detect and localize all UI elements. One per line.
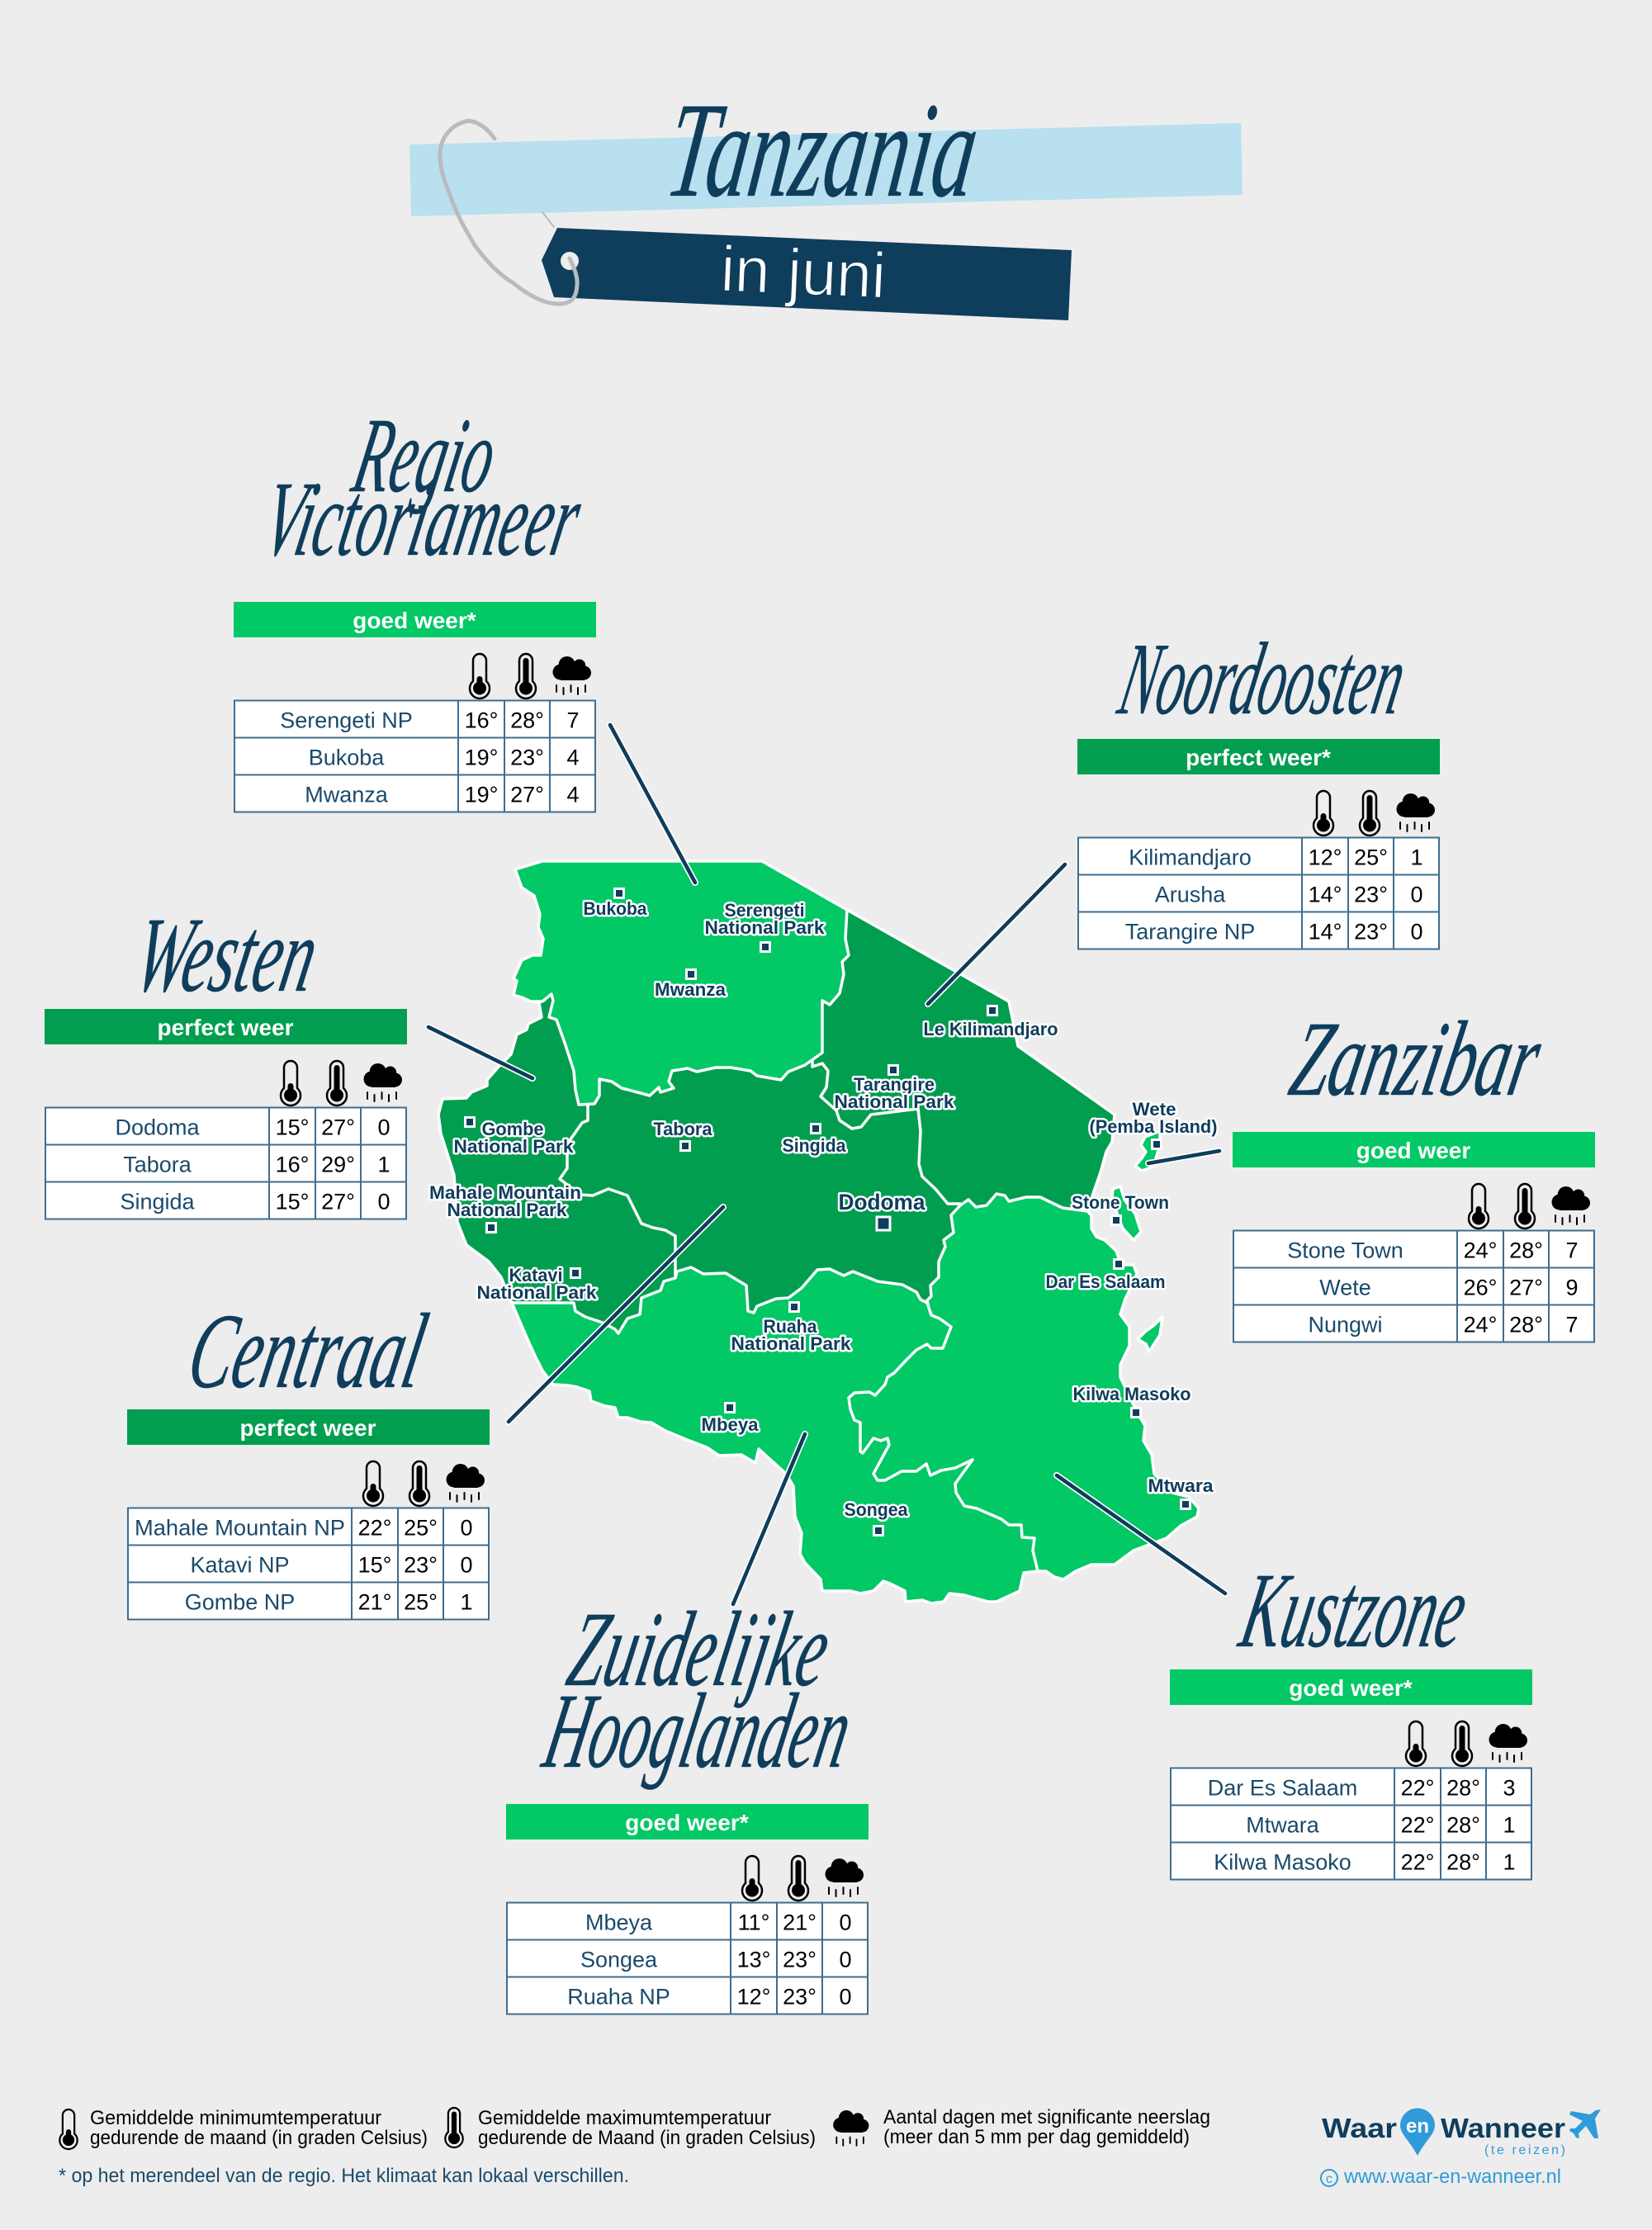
legend: maximum temperature [445, 2107, 816, 2149]
map label: Katavi National Park: National Park [477, 1282, 597, 1303]
map label: Le Kilimandjaro [923, 1006, 1058, 1039]
island: Zanzibar [1112, 1186, 1141, 1240]
legend text [883, 2106, 1210, 2148]
map label: Tarangire National Park: Tarangire [854, 1074, 935, 1095]
climate table: 29° [321, 1153, 355, 1177]
heading: Westen: Westen [125, 896, 328, 1015]
map label: Wete (Pemba Island) [1090, 1099, 1217, 1149]
climate table: 23° [404, 1552, 438, 1577]
climate table: 7 [1565, 1313, 1579, 1338]
climate table: 14° [1309, 882, 1342, 907]
climate table: 0 [839, 1985, 852, 2010]
map label: Gombe National Park: National Park [454, 1136, 574, 1157]
climate table: 13° [737, 1947, 770, 1972]
map label: Serengeti National Park [705, 900, 825, 951]
icon: location pin [1400, 2109, 1435, 2156]
climate table: 1 [377, 1153, 391, 1177]
icons: min, max, rain [470, 654, 591, 698]
climate table [45, 1108, 406, 1219]
climate table: Tabora [123, 1153, 192, 1177]
legend text: gedurende de Maand (in graden Celsius) [478, 2127, 816, 2149]
map label: Bukoba: Bukoba [583, 898, 647, 919]
climate table: 15° [276, 1189, 309, 1214]
climate table: 9 [1565, 1275, 1579, 1300]
connector: Noordoosten [928, 864, 1065, 1004]
rating bar: goed weer [234, 602, 596, 637]
logo wordmark right: Wanneer [1441, 2113, 1565, 2143]
climate table: 28° [1446, 1849, 1480, 1874]
heading: Regio Victoriameer [254, 396, 591, 579]
rating bar: perfect weer: perfect weer [158, 1015, 294, 1040]
map label: Mahale Mountain National Park: National Park [447, 1200, 567, 1220]
climate table: 22° [1401, 1849, 1434, 1874]
climate table: 27° [321, 1115, 355, 1139]
climate table: 15° [358, 1552, 391, 1577]
title: Tanzania: Tanzania [659, 74, 987, 225]
climate table: 1 [460, 1590, 473, 1615]
climate table: Bukoba [309, 745, 385, 769]
icons: min, max, rain [1406, 1721, 1527, 1766]
climate table: 23° [510, 745, 544, 769]
climate table: Serengeti NP [280, 708, 413, 733]
heading: Regio Victoriameer: Victoriameer [254, 460, 591, 579]
climate table: 16° [276, 1153, 309, 1177]
map label: Serengeti National Park: Serengeti [725, 900, 804, 921]
icons: min, max, rain [1469, 1184, 1590, 1229]
climate table: 0 [377, 1189, 391, 1214]
rating bar: perfect weer [127, 1409, 490, 1445]
climate table: 0 [839, 1910, 852, 1935]
climate table: 28° [1509, 1238, 1543, 1263]
border: Westen and Centraal [560, 1105, 675, 1278]
map label: Gombe National Park: Gombe [482, 1119, 543, 1139]
island: Pemba [1135, 1131, 1160, 1171]
climate table: 23° [783, 1947, 817, 1972]
climate table: 7 [1565, 1238, 1579, 1263]
subtitle: in juni: in juni [719, 232, 888, 312]
climate table: Mwanza [305, 783, 389, 807]
climate table: 23° [1354, 882, 1388, 907]
heading: Zuidelijke Hooglanden [534, 1590, 861, 1791]
map label: Stone Town [1072, 1192, 1169, 1225]
climate table: 24° [1464, 1238, 1497, 1263]
climate table: 24° [1464, 1313, 1497, 1338]
climate table [1078, 837, 1439, 949]
climate table: Tarangire NP [1125, 920, 1255, 945]
map label: Dar Es Salaam: Dar Es Salaam [1045, 1271, 1166, 1292]
map label: Kilwa Masoko: Kilwa Masoko [1073, 1384, 1190, 1404]
climate table: 1 [1410, 845, 1423, 870]
climate table: Kilwa Masoko [1214, 1849, 1351, 1874]
copyright icon [1321, 2170, 1337, 2186]
climate table: Ruaha NP [567, 1985, 670, 2010]
climate table [507, 1902, 868, 2015]
rating bar: goed weer [1170, 1669, 1532, 1705]
footnote: * op het merendeel van de regio. Het klimaat kan lokaal verschillen. [59, 2165, 629, 2187]
climate table [234, 700, 595, 812]
climate table: 28° [1509, 1313, 1543, 1338]
connector: Kustzone [1057, 1475, 1225, 1593]
legend text: (meer dan 5 mm per dag gemiddeld) [883, 2126, 1190, 2148]
climate table: 21° [358, 1590, 391, 1615]
map label: Mwanza [655, 969, 727, 1000]
climate table [1233, 1230, 1594, 1342]
map label: Bukoba [583, 888, 647, 919]
map label: Katavi National Park [477, 1265, 597, 1303]
connector: Regio Victoriameer [610, 725, 695, 883]
tagline: (te reizen) [1484, 2143, 1565, 2157]
climate table: 28° [1446, 1813, 1480, 1838]
border: Centraal and Noordoosten [812, 1059, 960, 1204]
rating bar: perfect weer: perfect weer [240, 1415, 376, 1441]
legend text [90, 2107, 428, 2149]
climate table: Kilimandjaro [1129, 845, 1252, 870]
climate table: Dodoma [115, 1115, 201, 1139]
climate table: Wete [1319, 1275, 1371, 1300]
climate table: Arusha [1155, 882, 1226, 907]
map label: Dar Es Salaam [1045, 1260, 1166, 1292]
climate table: Stone Town [1287, 1238, 1403, 1263]
climate table: 16° [465, 708, 498, 733]
logo wordmark left: Waar [1322, 2113, 1397, 2143]
climate table: 0 [1410, 920, 1423, 945]
map label: Tarangire National Park: National Park [834, 1091, 954, 1112]
heading: Zuidelijke Hooglanden: Hooglanden [534, 1672, 861, 1791]
region: Zuidelijke Hooglanden [512, 1267, 1038, 1603]
panel: Regio Victoriameer [234, 602, 596, 812]
climate table: 11° [738, 1910, 769, 1935]
climate table: 26° [1464, 1275, 1497, 1300]
island: Mafia [1138, 1317, 1162, 1352]
climate table: 27° [1509, 1275, 1543, 1300]
heading: Regio Victoriameer: Regio [343, 396, 506, 515]
panel: Zanzibar [1233, 1132, 1595, 1342]
climate table: 14° [1309, 920, 1342, 945]
climate table: 4 [566, 745, 580, 769]
map label: Mbeya [702, 1404, 759, 1435]
icons: min, max, rain [363, 1461, 485, 1506]
rating bar: perfect weer [45, 1009, 407, 1044]
climate table: Mahale Mountain NP [135, 1516, 345, 1541]
luggage tag [542, 228, 1072, 320]
legend text: Aantal dagen met significante neerslag [883, 2106, 1210, 2128]
map label: Singida: Singida [783, 1135, 846, 1156]
legend text: Gemiddelde maximumtemperatuur [478, 2107, 771, 2129]
map label: Tarangire National Park [834, 1065, 954, 1112]
legend text: Gemiddelde minimumtemperatuur [90, 2107, 381, 2129]
map label: Tabora: Tabora [654, 1119, 712, 1139]
climate table: 25° [404, 1516, 438, 1541]
climate table: 12° [1309, 845, 1342, 870]
icon: max thermometer [445, 2108, 463, 2147]
icon: location pin: en [1406, 2115, 1429, 2138]
map label: Tabora [654, 1119, 712, 1151]
climate table: 28° [1446, 1775, 1480, 1800]
map label: Le Kilimandjaro: Le Kilimandjaro [923, 1019, 1058, 1039]
legend: minimum temperature [59, 2107, 428, 2149]
tag string ring [440, 121, 577, 304]
map label: Mwanza: Mwanza [655, 979, 727, 1000]
panel: Noordoosten [1077, 739, 1440, 949]
icons: min, max, rain [1314, 791, 1435, 836]
region: Regio Victoriameer [514, 861, 849, 1105]
climate table: 25° [404, 1590, 438, 1615]
tag hole [561, 252, 579, 270]
climate table: Katavi NP [190, 1552, 290, 1577]
map label: Wete (Pemba Island): (Pemba Island) [1090, 1116, 1217, 1137]
rating bar: goed weer: goed weer* [353, 608, 476, 633]
map label: Serengeti National Park: National Park [705, 917, 825, 938]
climate table: 1 [1503, 1813, 1516, 1838]
map label: Mahale Mountain National Park: Mahale Mountain [429, 1182, 581, 1203]
rating bar: perfect weer: perfect weer* [1186, 745, 1331, 770]
climate table: 22° [1401, 1813, 1434, 1838]
climate table: 0 [460, 1552, 473, 1577]
icons: min, max, rain [742, 1856, 864, 1901]
climate table: 25° [1354, 845, 1388, 870]
map label: Ruaha National Park [731, 1303, 851, 1354]
climate table: 19° [465, 783, 498, 807]
climate table: 0 [377, 1115, 391, 1139]
connector: Zanzibar [1148, 1151, 1219, 1163]
icon: airplane [1569, 2109, 1601, 2138]
climate table: 0 [839, 1947, 852, 1972]
map label: Kilwa Masoko [1073, 1384, 1190, 1417]
heading: Centraal: Centraal [179, 1292, 436, 1411]
title band [409, 123, 1243, 216]
map label: Ruaha National Park: Ruaha [763, 1316, 817, 1337]
map label: Ruaha National Park: National Park [731, 1333, 851, 1354]
map label: Singida [783, 1124, 846, 1156]
map label: Dodoma: Dodoma [839, 1190, 925, 1214]
map label: Mtwara [1148, 1475, 1214, 1509]
climate table: Gombe NP [185, 1590, 295, 1615]
climate table: 21° [783, 1910, 817, 1935]
map label: Wete (Pemba Island): Wete [1133, 1099, 1176, 1120]
climate table: Singida [120, 1189, 196, 1214]
rating bar: goed weer: goed weer [1356, 1138, 1470, 1163]
map label: Stone Town: Stone Town [1072, 1192, 1169, 1213]
connector: Zuidelijke Hooglanden [733, 1434, 805, 1604]
climate table: Mtwara [1246, 1813, 1320, 1838]
climate table: Dar Es Salaam [1208, 1775, 1357, 1800]
climate table: 27° [321, 1189, 355, 1214]
climate table: 27° [510, 783, 544, 807]
map label: Dodoma [839, 1190, 925, 1230]
climate table: 23° [783, 1985, 817, 2010]
climate table: 4 [566, 783, 580, 807]
icon: min thermometer [59, 2109, 78, 2149]
map label: Songea: Songea [844, 1499, 908, 1520]
map label: Gombe National Park [454, 1118, 574, 1157]
panel: Westen [45, 1009, 407, 1219]
climate table: 22° [358, 1516, 391, 1541]
climate table: 28° [510, 708, 544, 733]
legend text [478, 2107, 816, 2149]
map label: Mbeya: Mbeya [702, 1414, 759, 1435]
panel: Kustzone [1170, 1669, 1532, 1879]
climate table: 0 [1410, 882, 1423, 907]
region: Westen, Centraal and Noordoosten (dark green) [438, 908, 1115, 1338]
copyright icon: c [1326, 2172, 1332, 2186]
logo: Waar en Wanneer [1321, 2109, 1601, 2188]
rating bar: goed weer: goed weer* [1289, 1675, 1413, 1701]
climate table: 7 [566, 708, 580, 733]
panel: Zuidelijke Hooglanden [506, 1804, 869, 2015]
climate table [128, 1508, 489, 1620]
climate table: 19° [465, 745, 498, 769]
heading: Noordoosten: Noordoosten [1110, 622, 1416, 736]
map label: Mtwara: Mtwara [1148, 1475, 1214, 1496]
icon: rain cloud [833, 2110, 869, 2146]
legend text: gedurende de maand (in graden Celsius) [90, 2127, 428, 2149]
rating bar: goed weer: goed weer* [625, 1810, 749, 1835]
icons: min, max, rain [281, 1061, 402, 1106]
climate table: 23° [1354, 920, 1388, 945]
climate table: Nungwi [1308, 1313, 1383, 1338]
title block: Tanzania in juni [409, 74, 1243, 320]
rating bar: goed weer [506, 1804, 869, 1839]
legend: rain days [833, 2106, 1210, 2148]
climate table [1171, 1768, 1531, 1879]
heading: Kustzone: Kustzone [1231, 1551, 1477, 1670]
connector: Westen [428, 1027, 533, 1078]
climate table: 22° [1401, 1775, 1434, 1800]
region: Kustzone [826, 1194, 1199, 1579]
climate table: Songea [580, 1947, 658, 1972]
climate table: 12° [737, 1985, 770, 2010]
heading: Zuidelijke Hooglanden: Zuidelijke [559, 1590, 840, 1709]
climate table: 0 [460, 1516, 473, 1541]
climate table: Mbeya [585, 1910, 653, 1935]
map of Tanzania [438, 861, 1199, 1603]
climate table: 1 [1503, 1849, 1516, 1874]
map label: Mahale Mountain National Park [429, 1182, 581, 1232]
climate table: 15° [276, 1115, 309, 1139]
rating bar: goed weer [1233, 1132, 1595, 1167]
map label: Katavi National Park: Katavi [509, 1265, 563, 1285]
rating bar: perfect weer [1077, 739, 1440, 774]
map label: Songea [844, 1499, 908, 1536]
climate table: 3 [1503, 1775, 1516, 1800]
connector: Centraal [509, 1207, 723, 1422]
website: www.waar-en-wanneer.nl [1343, 2166, 1561, 2188]
panel: Centraal [127, 1409, 490, 1620]
